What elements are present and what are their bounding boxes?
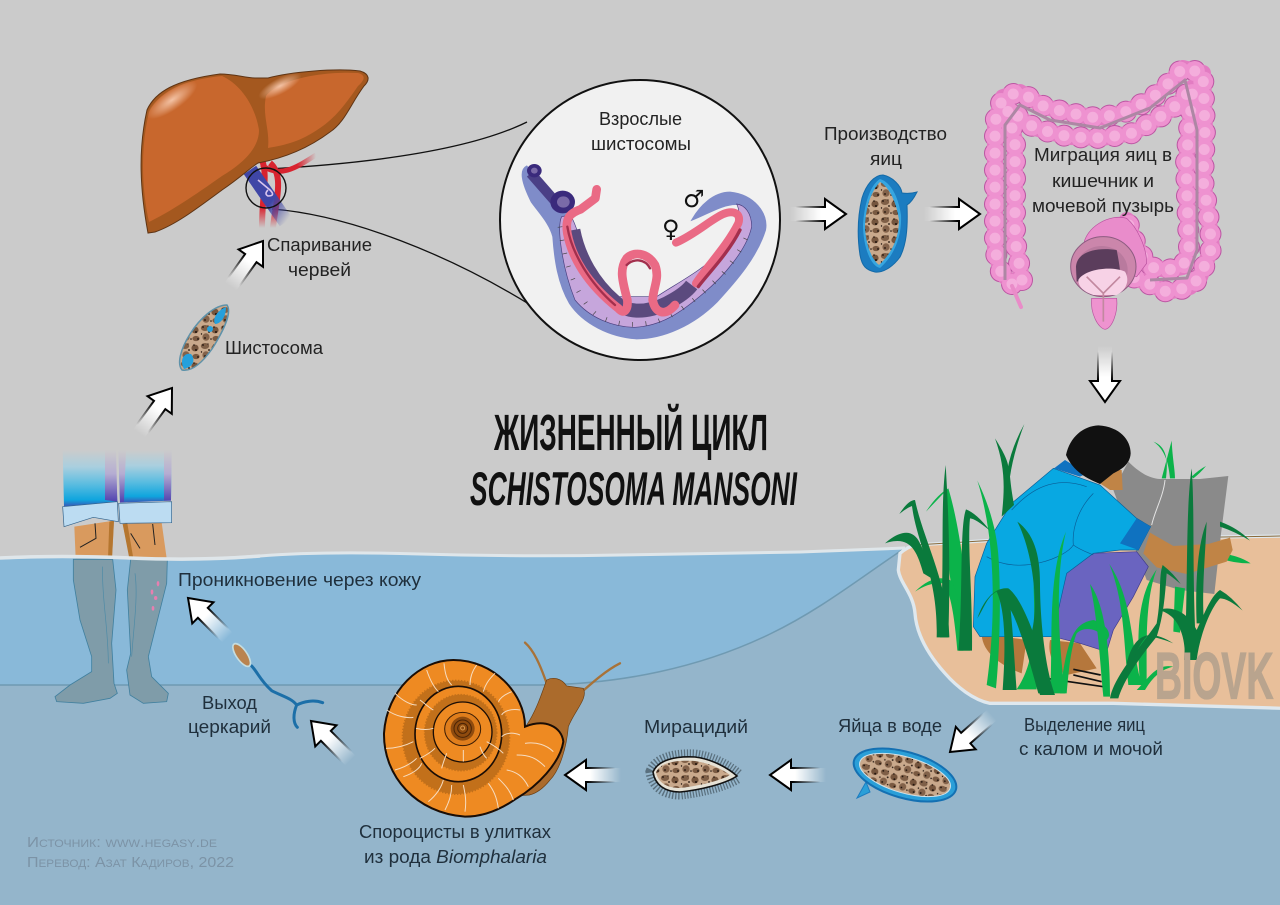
label: cercariae exit: церкарий — [188, 717, 271, 737]
tentacles — [525, 643, 620, 695]
appendix — [1012, 286, 1021, 307]
colon — [995, 68, 1212, 292]
arrow: down to person — [1090, 346, 1120, 402]
thigh shade — [108, 521, 133, 558]
magnifier disc — [500, 80, 780, 360]
source credits: Источник: www.hegasy.de — [27, 834, 217, 851]
magnified spot — [246, 168, 286, 208]
shell outer — [384, 660, 563, 817]
label: egg migration: мочевой пузырь — [1032, 196, 1174, 216]
label: eggs in water: Яйца в воде — [838, 716, 942, 736]
shirt seams — [987, 483, 1093, 565]
left submerged leg — [55, 559, 117, 703]
connector lines to magnifier — [268, 122, 532, 306]
label: mating — [267, 235, 372, 280]
icon: male symbol: ♂ — [683, 185, 705, 213]
ear and neck — [1100, 470, 1123, 490]
knee lines — [80, 523, 155, 548]
label: egg excretion: Выделение яиц — [1024, 715, 1145, 735]
label: skin penetration: Проникновение через кожу — [178, 570, 421, 590]
spiral centre — [454, 720, 471, 737]
collar and cuff — [1054, 460, 1151, 550]
head — [1066, 425, 1131, 484]
panel: adult worms magnifier — [500, 80, 780, 360]
source credits — [27, 834, 234, 871]
male outer body — [523, 167, 765, 338]
snail body — [503, 678, 584, 797]
whorl 3 — [433, 702, 492, 762]
sandals — [1035, 669, 1103, 687]
skin penetration marks — [151, 581, 159, 611]
shell dark band — [403, 681, 509, 794]
panel: deep water — [0, 548, 1280, 905]
panel: liver — [141, 68, 532, 306]
label: egg excretion: с калом и мочой — [1019, 739, 1163, 759]
dark grass — [885, 424, 1250, 698]
shell ribs — [386, 663, 553, 812]
arrow: to cercaria — [300, 710, 361, 771]
arrow: to snail — [565, 760, 621, 790]
male inner band — [560, 204, 752, 327]
arrow: to skin — [177, 587, 238, 648]
label: egg excretion — [1019, 715, 1163, 759]
light grass — [915, 481, 1185, 697]
label: egg migration: Миграция яиц в — [1034, 145, 1172, 165]
newspaper — [1113, 462, 1228, 594]
right submerged leg — [127, 559, 168, 703]
sand bank — [898, 536, 1280, 708]
arrow: to colon — [924, 199, 980, 229]
arrow: to liver — [218, 232, 275, 295]
surface ticks — [560, 227, 750, 324]
icon: miracidium — [653, 757, 737, 792]
label: egg production: яиц — [870, 149, 902, 169]
label: adult schistosomes: шистосомы — [591, 134, 691, 154]
panel: legs — [55, 450, 172, 703]
label: sporocysts: Спороцисты в улитках — [359, 822, 551, 842]
label: adult schistosomes: Взрослые — [599, 109, 682, 129]
icon: cercaria — [230, 641, 323, 727]
suckers — [531, 173, 558, 205]
whorl 4 — [445, 712, 481, 746]
colon centre band — [1005, 80, 1197, 280]
arrow: from legs to schistosomulum — [127, 379, 184, 442]
water surface line — [0, 548, 905, 559]
label: egg migration — [1032, 145, 1174, 216]
panel: snail — [384, 643, 620, 817]
panel: person on shore — [885, 424, 1280, 713]
label: egg migration: кишечник и — [1052, 171, 1154, 191]
feet — [982, 633, 1097, 675]
label: sporocysts: из рода Biomphalaria — [364, 847, 547, 867]
label: mating: червей — [288, 260, 351, 280]
shirt — [973, 468, 1151, 637]
newspaper crease — [1152, 480, 1165, 525]
shore top edge — [915, 536, 1280, 545]
liver shape — [141, 70, 368, 233]
arm — [1143, 533, 1233, 574]
icon: egg in water — [848, 738, 962, 812]
label: adult schistosomes — [591, 109, 691, 154]
label: mating: Спаривание — [267, 235, 372, 255]
arrow: to water eggs — [940, 704, 1002, 763]
icon: female symbol: ♀ — [662, 215, 680, 243]
bladder — [1071, 217, 1147, 329]
left lobe — [143, 76, 259, 222]
shorts — [63, 450, 117, 507]
label: egg production — [824, 124, 947, 169]
label: schistosoma: Шистосома — [225, 338, 324, 358]
background grass — [1153, 441, 1251, 563]
icon: egg — [858, 175, 917, 272]
worm glyph in vessel — [258, 180, 273, 196]
trousers — [1053, 552, 1148, 652]
male dark channel — [573, 230, 692, 311]
arrow: to egg — [790, 199, 846, 229]
icon: schistosomulum — [180, 305, 229, 370]
label: miracidium: Мирацидий — [644, 717, 748, 737]
arrow: to miracidium — [770, 760, 826, 790]
liver highlights — [142, 75, 202, 125]
left thigh — [74, 521, 114, 558]
label: cercariae exit — [188, 693, 271, 737]
panel: intestine and bladder — [995, 68, 1212, 329]
female worm — [567, 189, 740, 312]
waterline over legs — [0, 556, 260, 559]
title: ЖИЗНЕННЫЙ ЦИКЛ — [493, 403, 768, 461]
label: cercariae exit: Выход — [202, 693, 258, 713]
whorl 2 — [415, 686, 502, 782]
source credits: Перевод: Азат Кадиров, 2022 — [27, 854, 234, 871]
label: sporocysts — [359, 822, 551, 867]
worm drawing — [523, 164, 765, 338]
leg contour lines — [103, 567, 136, 663]
label: egg production: Производство — [824, 124, 947, 144]
right lobe — [265, 73, 364, 148]
title: SCHISTOSOMA MANSONI — [470, 462, 798, 515]
right thigh — [123, 523, 167, 558]
panel: shallow water — [0, 548, 910, 905]
blood vessels — [250, 155, 316, 228]
cuffs — [63, 502, 118, 527]
title — [470, 403, 798, 515]
